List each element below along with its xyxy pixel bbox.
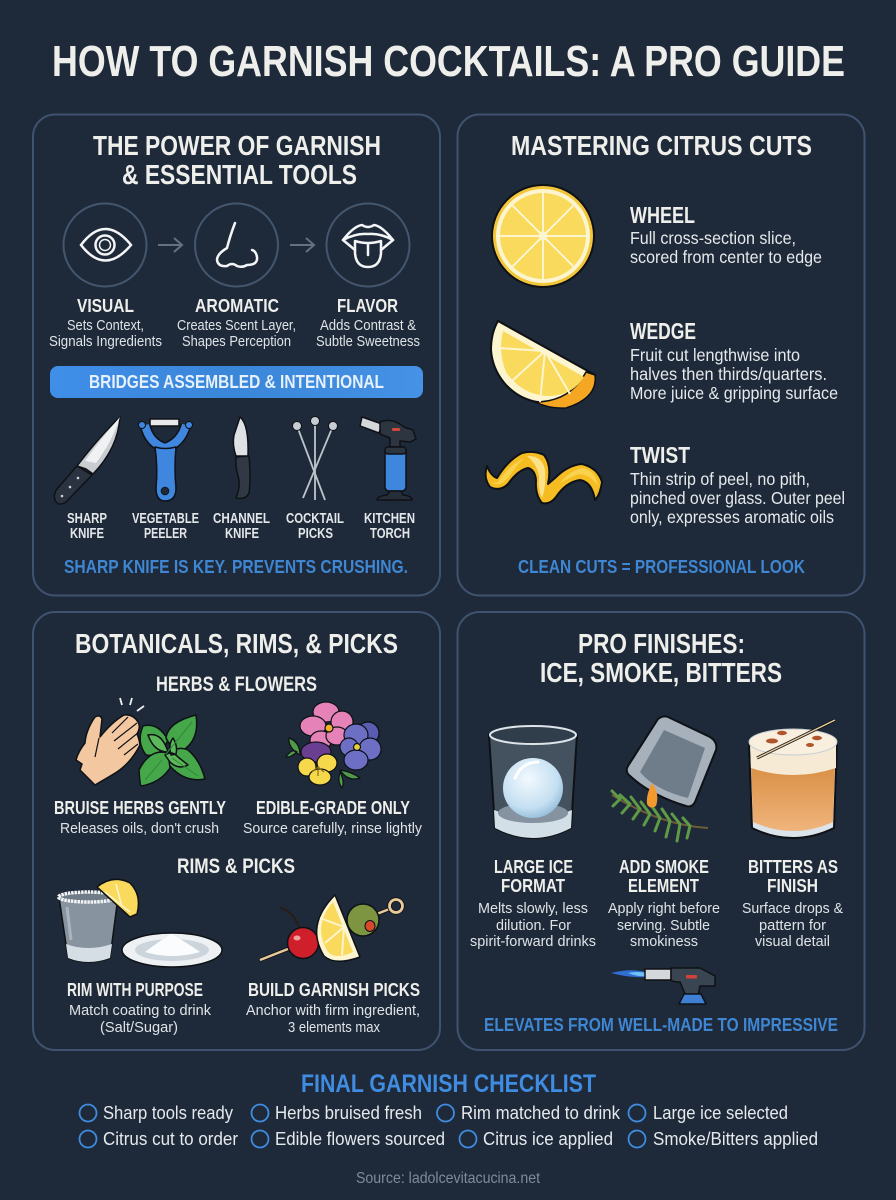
wedge text xyxy=(630,318,838,403)
checklist item: rim: Rim matched to drink xyxy=(461,1102,621,1123)
large ice text: LARGE ICE xyxy=(494,857,573,877)
bitters text: pattern for xyxy=(759,917,826,934)
icon: lemon wedge xyxy=(491,321,595,408)
panel: the power of garnish and essential tools xyxy=(33,114,440,596)
icon: cocktail picks xyxy=(292,416,338,500)
wheel text: WHEEL xyxy=(630,202,695,228)
pick text: 3 elements max xyxy=(288,1019,380,1036)
smoke text: Apply right before xyxy=(608,900,720,917)
tool labels: CHANNEL xyxy=(213,511,270,527)
icon: garnish pick xyxy=(260,895,402,961)
icon: lit torch xyxy=(611,968,715,1004)
bruise herbs text xyxy=(54,798,226,837)
tool labels: VEGETABLE xyxy=(132,511,199,527)
wheel text xyxy=(630,202,822,267)
pick text xyxy=(246,980,420,1036)
tool labels xyxy=(67,511,415,542)
panel heading: ICE, SMOKE, BITTERS xyxy=(540,657,782,688)
icon: ice ball glass xyxy=(489,726,577,838)
icon: hands bruising mint xyxy=(76,698,205,786)
tool labels: SHARP xyxy=(67,511,107,527)
edible grade text: Source carefully, rinse lightly xyxy=(243,820,422,837)
tool labels: TORCH xyxy=(370,526,410,542)
icon: citrus twist xyxy=(486,452,602,503)
twist text: TWIST xyxy=(630,442,690,468)
tool labels: KNIFE xyxy=(70,526,104,542)
callout: clean cuts: CLEAN CUTS = PROFESSIONAL LOOK xyxy=(518,556,806,577)
panel heading xyxy=(93,130,381,190)
subheading: herbs and flowers: HERBS & FLOWERS xyxy=(156,673,317,696)
icon: salt-rimmed glass and plate xyxy=(58,879,222,967)
rim text: Match coating to drink xyxy=(69,1002,211,1019)
bitters text: visual detail xyxy=(755,933,830,950)
bitters text xyxy=(742,857,843,950)
checklist item: sharp tools: Sharp tools ready xyxy=(103,1102,234,1123)
checklist item: citrus ice: Citrus ice applied xyxy=(483,1128,613,1149)
icon: tongue xyxy=(326,204,410,286)
subheading: rims and picks: RIMS & PICKS xyxy=(177,855,295,878)
checklist item: smoke and bitters: Smoke/Bitters applied xyxy=(653,1128,818,1149)
twist text: only, expresses aromatic oils xyxy=(630,507,834,527)
visual label: Signals Ingredients xyxy=(49,333,162,350)
tool labels: COCKTAIL xyxy=(286,511,344,527)
icon: lemon wheel xyxy=(492,185,594,287)
visual label: Sets Context, xyxy=(67,317,144,334)
checklist item: edible flowers: Edible flowers sourced xyxy=(275,1128,445,1149)
visual label: VISUAL xyxy=(77,296,134,316)
icon: edible flowers xyxy=(286,702,381,788)
aromatic label: Shapes Perception xyxy=(182,333,291,350)
flavor label xyxy=(316,296,420,350)
icon: eye xyxy=(64,204,146,286)
smoke text xyxy=(608,857,720,950)
icon: bitters drink xyxy=(749,720,837,838)
icon: sharp knife xyxy=(54,417,120,504)
checklist heading: FINAL GARNISH CHECKLIST xyxy=(301,1070,596,1098)
aromatic label xyxy=(177,296,296,350)
tool labels: PEELER xyxy=(144,526,187,542)
large ice text: Melts slowly, less xyxy=(478,900,588,917)
wedge text: WEDGE xyxy=(630,318,696,344)
panel heading: PRO FINISHES: xyxy=(578,628,745,659)
icon: vegetable peeler xyxy=(138,419,192,501)
wedge text: More juice & gripping surface xyxy=(630,383,838,403)
bitters text: BITTERS AS xyxy=(748,857,838,877)
panel heading xyxy=(540,628,782,688)
smoke text: ADD SMOKE xyxy=(619,857,709,877)
arrow: visual to aromatic xyxy=(158,238,182,252)
icon: kitchen torch xyxy=(360,417,416,500)
flavor label: FLAVOR xyxy=(337,296,398,316)
bruise herbs text: BRUISE HERBS GENTLY xyxy=(54,798,226,818)
bruise herbs text: Releases oils, don't crush xyxy=(60,820,219,837)
smoke text: ELEMENT xyxy=(628,876,699,896)
panel: botanicals, rims and picks xyxy=(33,612,440,1050)
edible grade text: EDIBLE-GRADE ONLY xyxy=(256,798,410,818)
banner xyxy=(50,366,423,398)
smoke text: smokiness xyxy=(630,933,698,950)
aromatic label: AROMATIC xyxy=(195,296,279,316)
pick text: BUILD GARNISH PICKS xyxy=(248,980,420,1000)
wedge text: halves then thirds/quarters. xyxy=(630,364,827,384)
checklist item: large ice: Large ice selected xyxy=(653,1102,788,1123)
callout: sharp knife: SHARP KNIFE IS KEY. PREVENTS CRUSHING. xyxy=(64,556,408,577)
callout: elevates: ELEVATES FROM WELL-MADE TO IMPRESSIVE xyxy=(484,1014,838,1035)
aromatic label: Creates Scent Layer, xyxy=(177,317,296,334)
source line: Source: ladolcevitacucina.net xyxy=(356,1170,540,1187)
twist text: Thin strip of peel, no pith, xyxy=(630,469,810,489)
bitters text: Surface drops & xyxy=(742,900,843,917)
panel: pro finishes xyxy=(458,612,864,1050)
pick text: Anchor with firm ingredient, xyxy=(246,1002,420,1019)
tool labels: KITCHEN xyxy=(364,511,415,527)
rim text xyxy=(67,980,211,1036)
twist text: pinched over glass. Outer peel xyxy=(630,488,845,508)
tool labels: PICKS xyxy=(298,526,333,542)
checklist xyxy=(80,1070,818,1149)
icon: channel knife xyxy=(233,417,250,498)
rim text: (Salt/Sugar) xyxy=(100,1019,178,1036)
panel heading: THE POWER OF GARNISH xyxy=(93,130,381,161)
panel heading: BOTANICALS, RIMS, & PICKS xyxy=(75,628,398,659)
edible grade text xyxy=(243,798,422,837)
wheel text: Full cross-section slice, xyxy=(630,228,796,248)
bitters text: FINISH xyxy=(767,876,818,896)
banner: BRIDGES ASSEMBLED & INTENTIONAL xyxy=(89,371,384,392)
twist text xyxy=(630,442,845,527)
checklist item: citrus cut: Citrus cut to order xyxy=(103,1128,238,1149)
large ice text: dilution. For xyxy=(496,917,571,934)
icon: nose xyxy=(195,204,278,286)
large ice text: spirit-forward drinks xyxy=(470,933,596,950)
checklist item: herbs: Herbs bruised fresh xyxy=(275,1102,422,1123)
wheel text: scored from center to edge xyxy=(630,247,822,267)
arrow: aromatic to flavor xyxy=(290,238,314,252)
panel: mastering citrus cuts xyxy=(458,114,864,596)
wedge text: Fruit cut lengthwise into xyxy=(630,345,800,365)
large ice text: FORMAT xyxy=(501,876,565,896)
panel heading: MASTERING CITRUS CUTS xyxy=(511,130,812,161)
icon: smoked glass with rosemary xyxy=(612,716,716,841)
rim text: RIM WITH PURPOSE xyxy=(67,980,203,1000)
tool labels: KNIFE xyxy=(225,526,259,542)
smoke text: serving. Subtle xyxy=(617,917,710,934)
panel heading: & ESSENTIAL TOOLS xyxy=(122,159,357,190)
flavor label: Subtle Sweetness xyxy=(316,333,420,350)
large ice text xyxy=(470,857,596,950)
flavor label: Adds Contrast & xyxy=(320,317,416,334)
visual label xyxy=(49,296,162,350)
